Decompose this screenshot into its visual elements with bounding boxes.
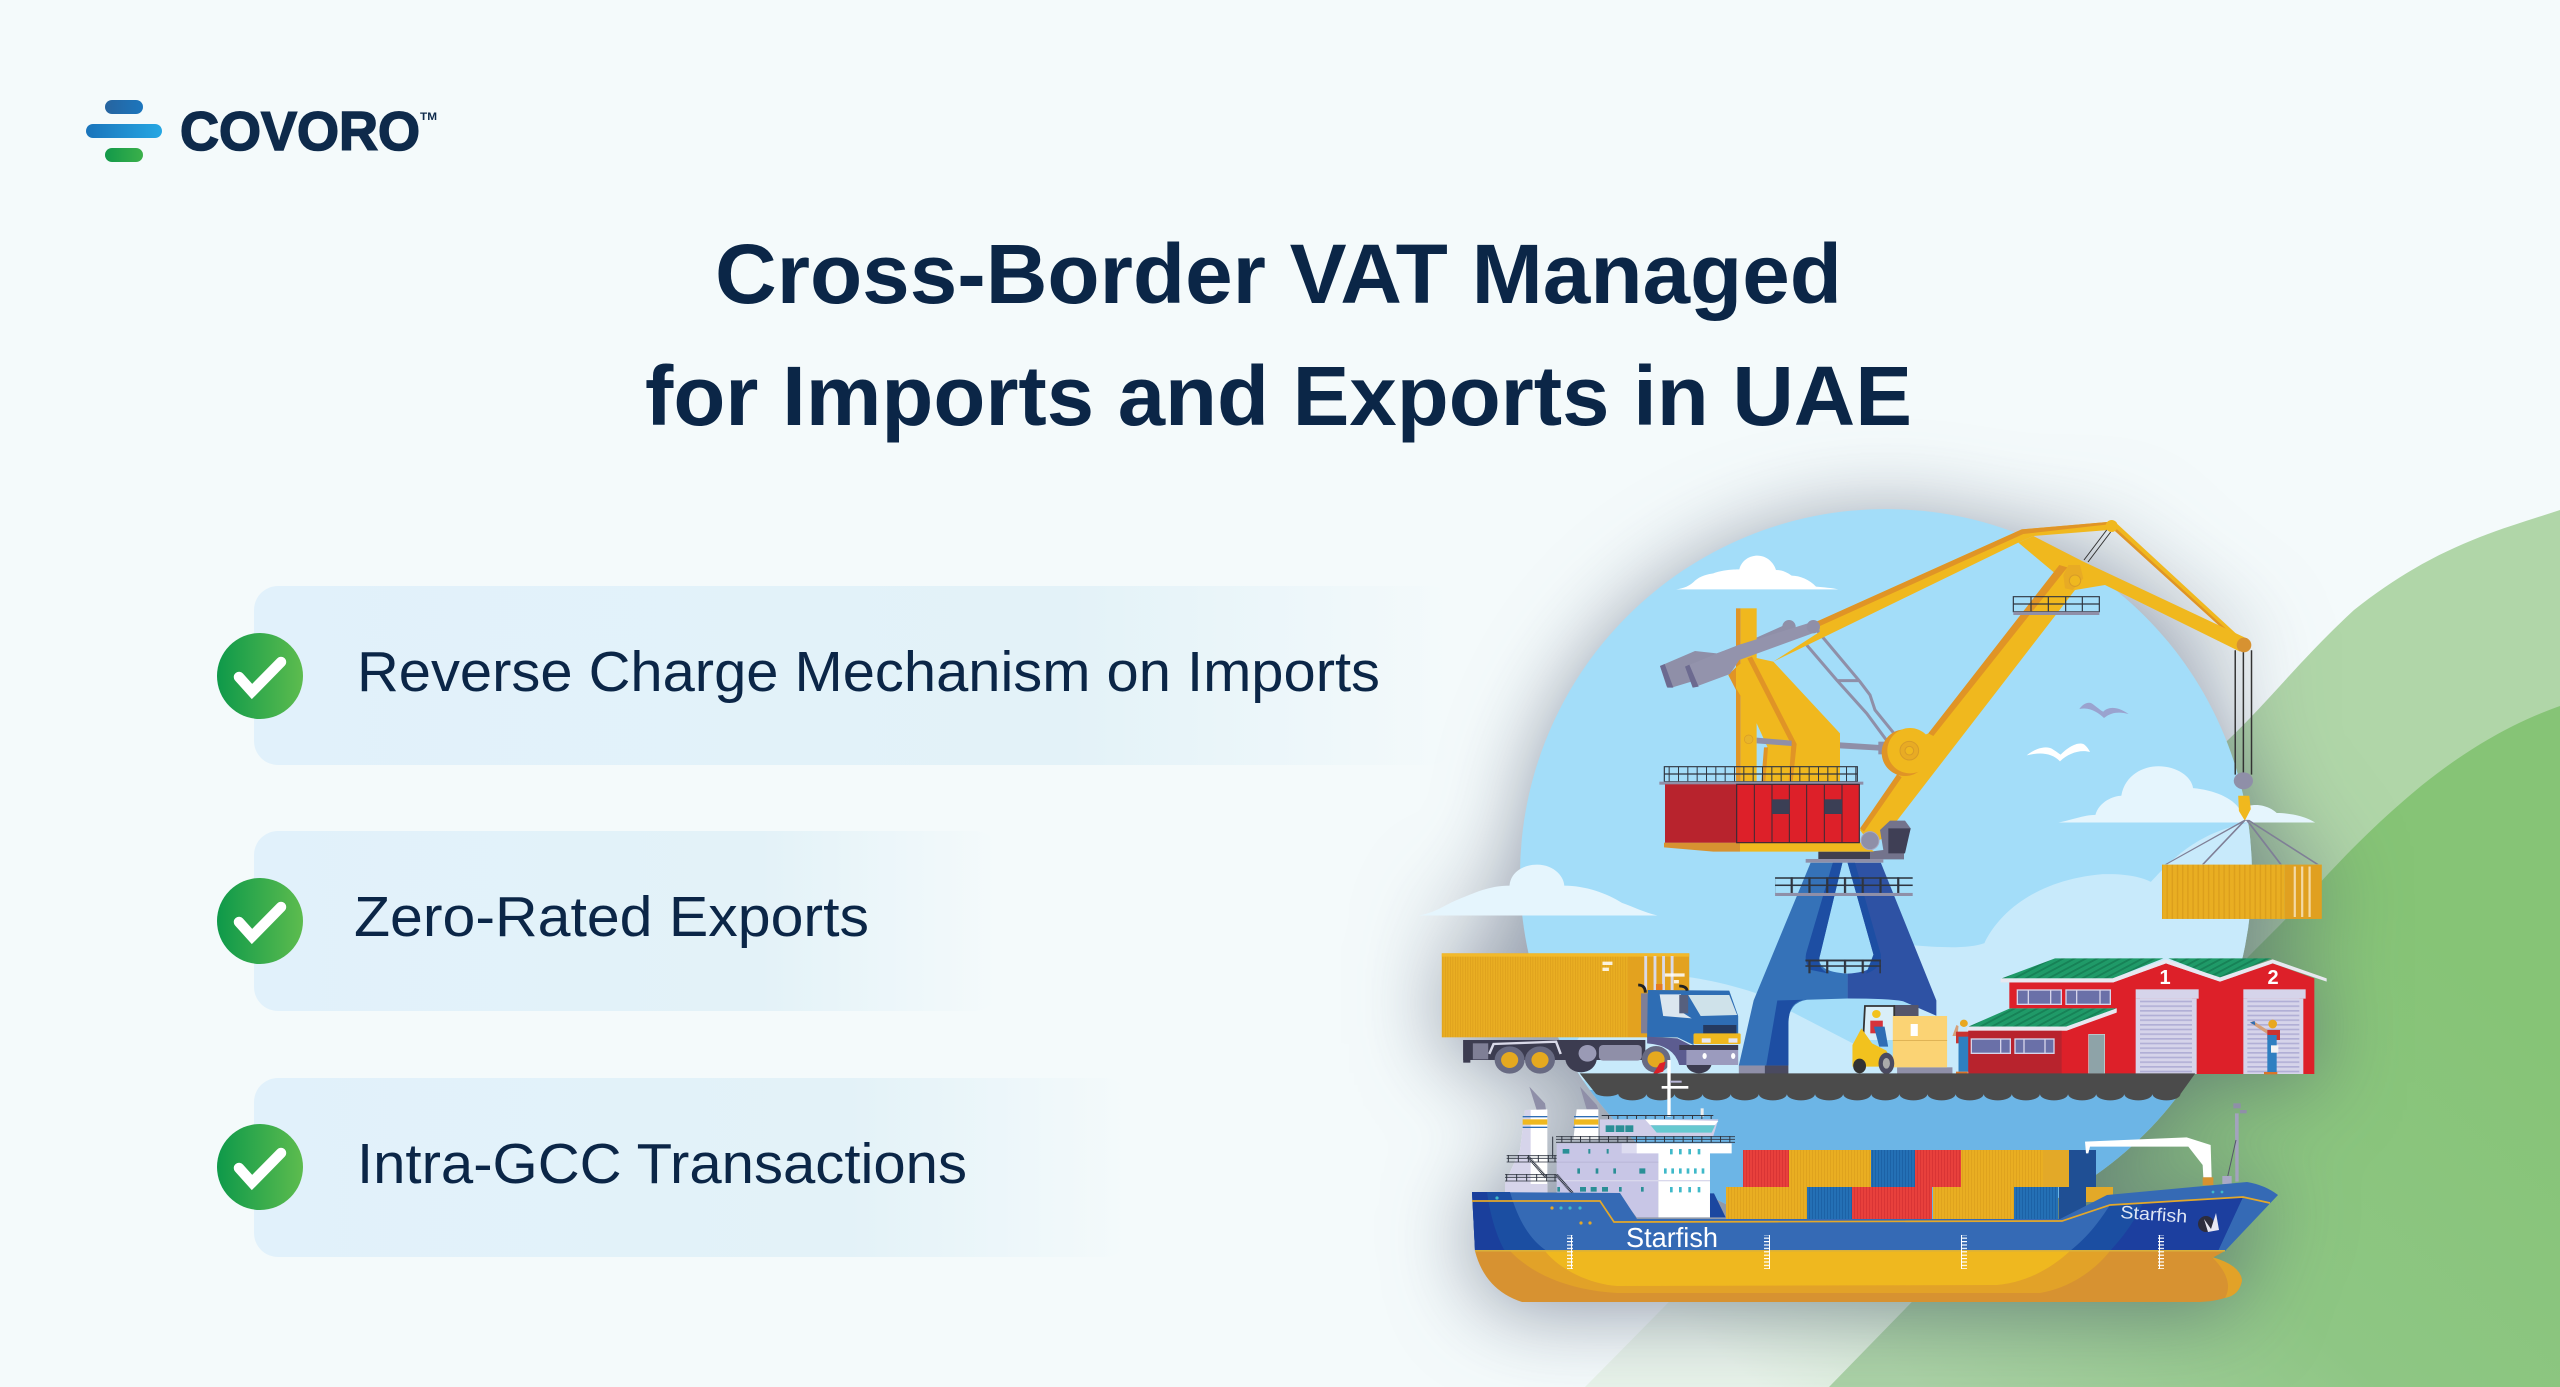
bow emblem [2198, 1213, 2219, 1232]
cloud left [1418, 865, 1657, 916]
accommodation block [1557, 1143, 1732, 1217]
portholes [1495, 1191, 2223, 1225]
fork mast [1894, 1005, 1919, 1016]
truck [1442, 953, 1741, 1075]
lower platform [1805, 960, 1881, 973]
counterweight front [1685, 620, 1820, 688]
title: for Imports and Exports in UAE [645, 349, 1912, 443]
rear post [1736, 608, 1757, 783]
truck container [1442, 953, 1689, 1037]
hull dark bow [2070, 1197, 2243, 1251]
eaves [2001, 959, 2327, 982]
label: Zero-Rated Exports [354, 885, 869, 949]
title: Cross-Border VAT Managed [715, 227, 1842, 321]
warehouse numbers [2159, 967, 2279, 989]
cargo box [1893, 1016, 1947, 1067]
leg bases [1739, 1066, 1788, 1074]
door [2089, 1034, 2105, 1074]
hull blue [1472, 1182, 2278, 1251]
boom arm [1773, 522, 2117, 662]
logo wordmark: COVORO [180, 100, 420, 162]
waterline [1475, 1250, 2225, 1252]
hull dark left [1472, 1192, 1547, 1251]
driver [1870, 1010, 1888, 1047]
port illustration [1418, 490, 2327, 1302]
hill: dark green [1829, 706, 2560, 1387]
beacon [1656, 984, 1662, 990]
upper crane and birds [1659, 520, 2251, 863]
containers top row [1743, 1150, 2096, 1187]
bridge [1600, 1115, 1718, 1136]
cabin railing [1659, 767, 1863, 785]
main jib [1860, 565, 2080, 843]
deck stripe [1472, 1197, 2270, 1222]
roof sections [2002, 958, 2272, 978]
counterweight rear [1660, 620, 1796, 688]
check icon [217, 878, 303, 964]
pale background clouds [1548, 821, 2288, 1081]
dock [1580, 1073, 2195, 1100]
stairs [1528, 1157, 1573, 1193]
title [645, 227, 1912, 443]
boom tips [2106, 520, 2251, 652]
pill [254, 1078, 1129, 1257]
exhaust pipes [1638, 985, 1687, 993]
warehouse numbers: 1 [2159, 967, 2171, 989]
cloud top [1676, 556, 1838, 589]
a-frame [1728, 657, 1840, 782]
hills [1585, 510, 2560, 1387]
forklift body [1852, 1028, 1894, 1067]
hull mid orange [1510, 1251, 2110, 1293]
wedge [1710, 1193, 1726, 1217]
water [1590, 1090, 2176, 1219]
draft marks [1567, 1235, 2164, 1269]
upper platform [2013, 597, 2099, 615]
cabin base [1664, 843, 1874, 852]
bulb highlight [2212, 1257, 2242, 1298]
hoist cables [2234, 650, 2252, 775]
warehouse numbers: 2 [2267, 967, 2279, 989]
check icon [217, 1124, 303, 1210]
ship name bow: Starfish [2120, 1202, 2188, 1227]
windows [1971, 990, 2110, 1053]
forklift [1852, 1005, 1972, 1074]
slings [2165, 820, 2319, 864]
fork base [1897, 1067, 1952, 1074]
warehouse [1967, 958, 2327, 1074]
hull darker left [1472, 1192, 1505, 1251]
cloud right [2058, 766, 2315, 823]
upper chord [2018, 536, 2247, 652]
wheel chock [1652, 1062, 1666, 1075]
truck chassis [1463, 1040, 1645, 1072]
deck crane [2085, 1103, 2247, 1185]
bird grey [2079, 703, 2129, 718]
worker left [1952, 1020, 1972, 1074]
label: Intra-GCC Transactions [357, 1132, 967, 1196]
funnel two [1573, 1087, 1598, 1140]
truck rear wheels [1495, 1046, 1555, 1074]
lower hinge [1861, 832, 1879, 850]
hull lower orange [1475, 1251, 2242, 1302]
back stay [2111, 524, 2247, 643]
hull [1472, 1182, 2278, 1302]
gray struts [1757, 630, 1897, 754]
hull darker bow [2110, 1197, 2243, 1251]
list item: intra-gcc [217, 1078, 1129, 1257]
trademark: TM [420, 111, 437, 123]
blue leg right [1848, 863, 1936, 1016]
dark wing [1968, 1031, 2062, 1074]
pivot lower [1882, 728, 1933, 776]
blue leg left [1739, 863, 1848, 1066]
lower crane and hanging load [1418, 650, 2322, 1074]
mid platform [1775, 877, 1913, 896]
truck cab [1641, 990, 1741, 1065]
bird white [2027, 744, 2090, 761]
shutter one [2136, 989, 2199, 1074]
mast [1662, 1060, 1704, 1117]
lower roof [1967, 1008, 2117, 1031]
list item: zero-rated [217, 831, 999, 1011]
stay cables [2084, 530, 2111, 562]
main body [1968, 963, 2314, 1074]
deck railings [1505, 1136, 1735, 1181]
hanging container [2162, 865, 2322, 919]
truck front wheels [1642, 1046, 1712, 1073]
list item: reverse charge [217, 586, 1454, 765]
funnel one [1505, 1087, 1547, 1193]
forklift wheels [1853, 1053, 1894, 1074]
hull yellow [1545, 1251, 2070, 1286]
logo mark [86, 100, 162, 162]
fork cage [1863, 1006, 1894, 1040]
hill: light green [1585, 510, 2560, 1387]
hook block [2234, 772, 2253, 821]
shutter two [2243, 989, 2306, 1074]
sky backdrop [1500, 490, 2288, 1270]
label: Reverse Charge Mechanism on Imports [357, 640, 1380, 704]
blue leg shading [1766, 863, 1881, 1066]
cabin [1665, 784, 1859, 843]
worker right [2250, 1020, 2280, 1074]
logo [86, 100, 437, 162]
check icon [217, 633, 303, 719]
pill [254, 831, 999, 1011]
containers bottom row [1726, 1187, 2113, 1219]
machinery block [1806, 821, 1911, 863]
ship name stern: Starfish [1626, 1222, 1718, 1253]
ship superstructure [1505, 1060, 1735, 1217]
pivot upper [2063, 565, 2083, 590]
pill [254, 586, 1454, 765]
